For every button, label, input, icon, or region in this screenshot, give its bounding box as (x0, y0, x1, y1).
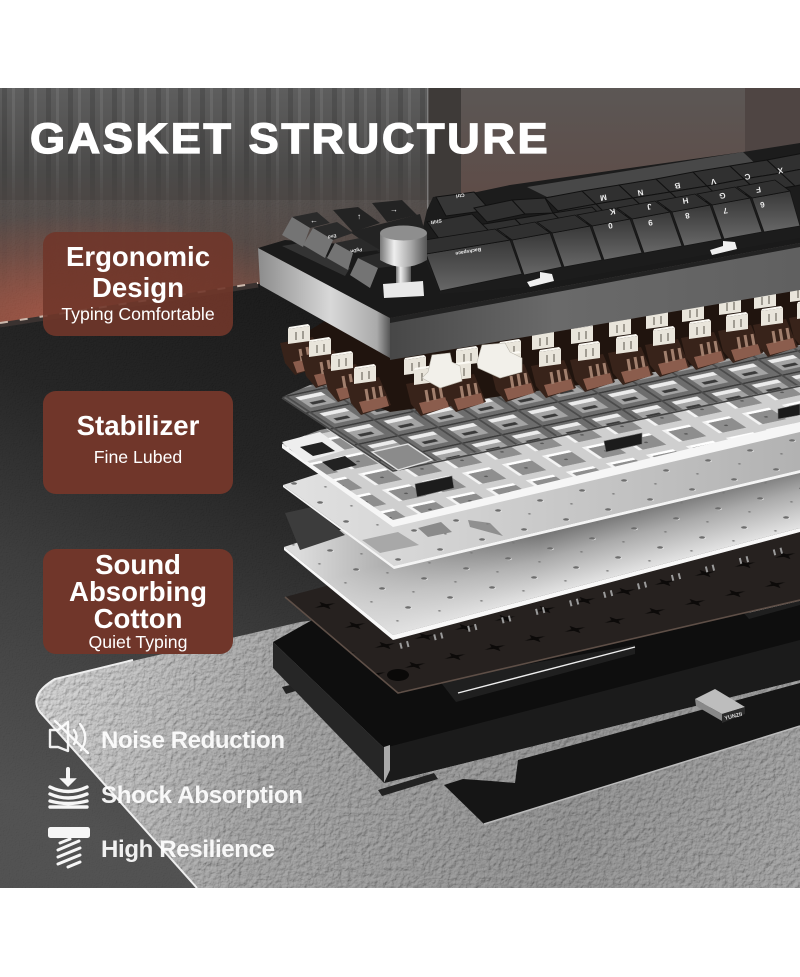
switches right rows (531, 282, 800, 398)
key legends: B (674, 181, 681, 190)
key legends: 6 (759, 200, 765, 209)
bottom cover (444, 683, 800, 824)
front row keycaps (426, 191, 800, 291)
key legends: 8 (684, 211, 690, 220)
key legends: H (682, 196, 689, 205)
key legends: PgDn (350, 247, 362, 254)
panel: stabilizer (43, 391, 233, 494)
subtitle: Typing Comfortable (61, 304, 215, 324)
white stabilizers (422, 343, 522, 388)
dark sheet (285, 507, 345, 550)
key legends: J (646, 202, 652, 211)
key tops (427, 153, 800, 240)
lower case (273, 605, 800, 783)
key legends: 9 (647, 218, 653, 227)
icon: shock absorption (50, 769, 87, 807)
key legends: M (599, 192, 608, 203)
USB dongle (695, 689, 745, 723)
label: noise reduction: Noise Reduction (101, 727, 285, 754)
key legends: 7 (722, 206, 728, 215)
subtitle: Quiet Typing (89, 632, 187, 652)
textured desk mat (35, 620, 800, 888)
plate foam clips (415, 404, 800, 497)
aluminium top case (258, 240, 800, 360)
PCB plate (283, 432, 800, 569)
label: shock absorption: Shock Absorption (101, 782, 303, 809)
key legends: Shift (430, 217, 442, 225)
key legends: ↑ (357, 212, 361, 221)
slots in desk mat (282, 683, 438, 796)
subtitle: Fine Lubed (94, 447, 182, 467)
heading: ergonomic design (66, 241, 210, 303)
key legends: → (390, 205, 398, 214)
key legends: Ctrl (455, 191, 465, 199)
volume knob (380, 226, 427, 298)
gray stabilizer frame (282, 345, 800, 472)
stabilizer clips on case (527, 241, 737, 287)
heading: sound absorbing cotton: Sound (95, 549, 181, 580)
key legends: K (609, 207, 616, 216)
panel: ergonomic design (43, 232, 233, 336)
label: high resilience: High Resilience (101, 836, 275, 863)
key legends: V (709, 177, 717, 186)
heading: sound absorbing cotton: Cotton (94, 603, 182, 634)
heading: ergonomic design: Ergonomic (66, 241, 210, 272)
metal bars (442, 600, 800, 702)
floor (0, 200, 432, 888)
back band of keys (527, 152, 760, 197)
key legends: G (719, 190, 726, 200)
bottom white plate (284, 470, 800, 640)
icon: noise reduction (50, 721, 88, 753)
switch plate with square cut-outs (282, 385, 800, 527)
key legends: C (744, 172, 751, 181)
heading: stabilizer: Stabilizer (77, 410, 200, 441)
back wall (0, 88, 800, 330)
key legends: ← (310, 216, 318, 225)
sound absorbing foam (285, 515, 800, 693)
heading: sound absorbing cotton: Absorbing (69, 576, 207, 607)
key legends: N (637, 188, 644, 197)
key legends: 0 (607, 221, 613, 230)
icon: high resilience (48, 827, 90, 867)
dark switch bodies behind (310, 292, 800, 412)
key legends: F (755, 185, 762, 194)
keycaps (282, 143, 800, 294)
heading: sound absorbing cotton (69, 549, 207, 634)
key legends: Backspace (455, 246, 482, 256)
USB dongle: YUNZII (724, 712, 743, 722)
key legends: X (776, 166, 784, 175)
left side keycaps (282, 212, 403, 288)
title: GASKET STRUCTURE (30, 115, 548, 163)
heading: ergonomic design: Design (92, 272, 184, 303)
panel: sound absorbing cotton (43, 549, 233, 654)
switches left cluster (280, 324, 391, 415)
arrow keys behind (333, 200, 430, 253)
cable along the horizon (0, 283, 258, 325)
key legends: End (327, 233, 337, 240)
key block base (423, 143, 800, 240)
key legends (310, 166, 784, 256)
switches centre (404, 339, 536, 416)
